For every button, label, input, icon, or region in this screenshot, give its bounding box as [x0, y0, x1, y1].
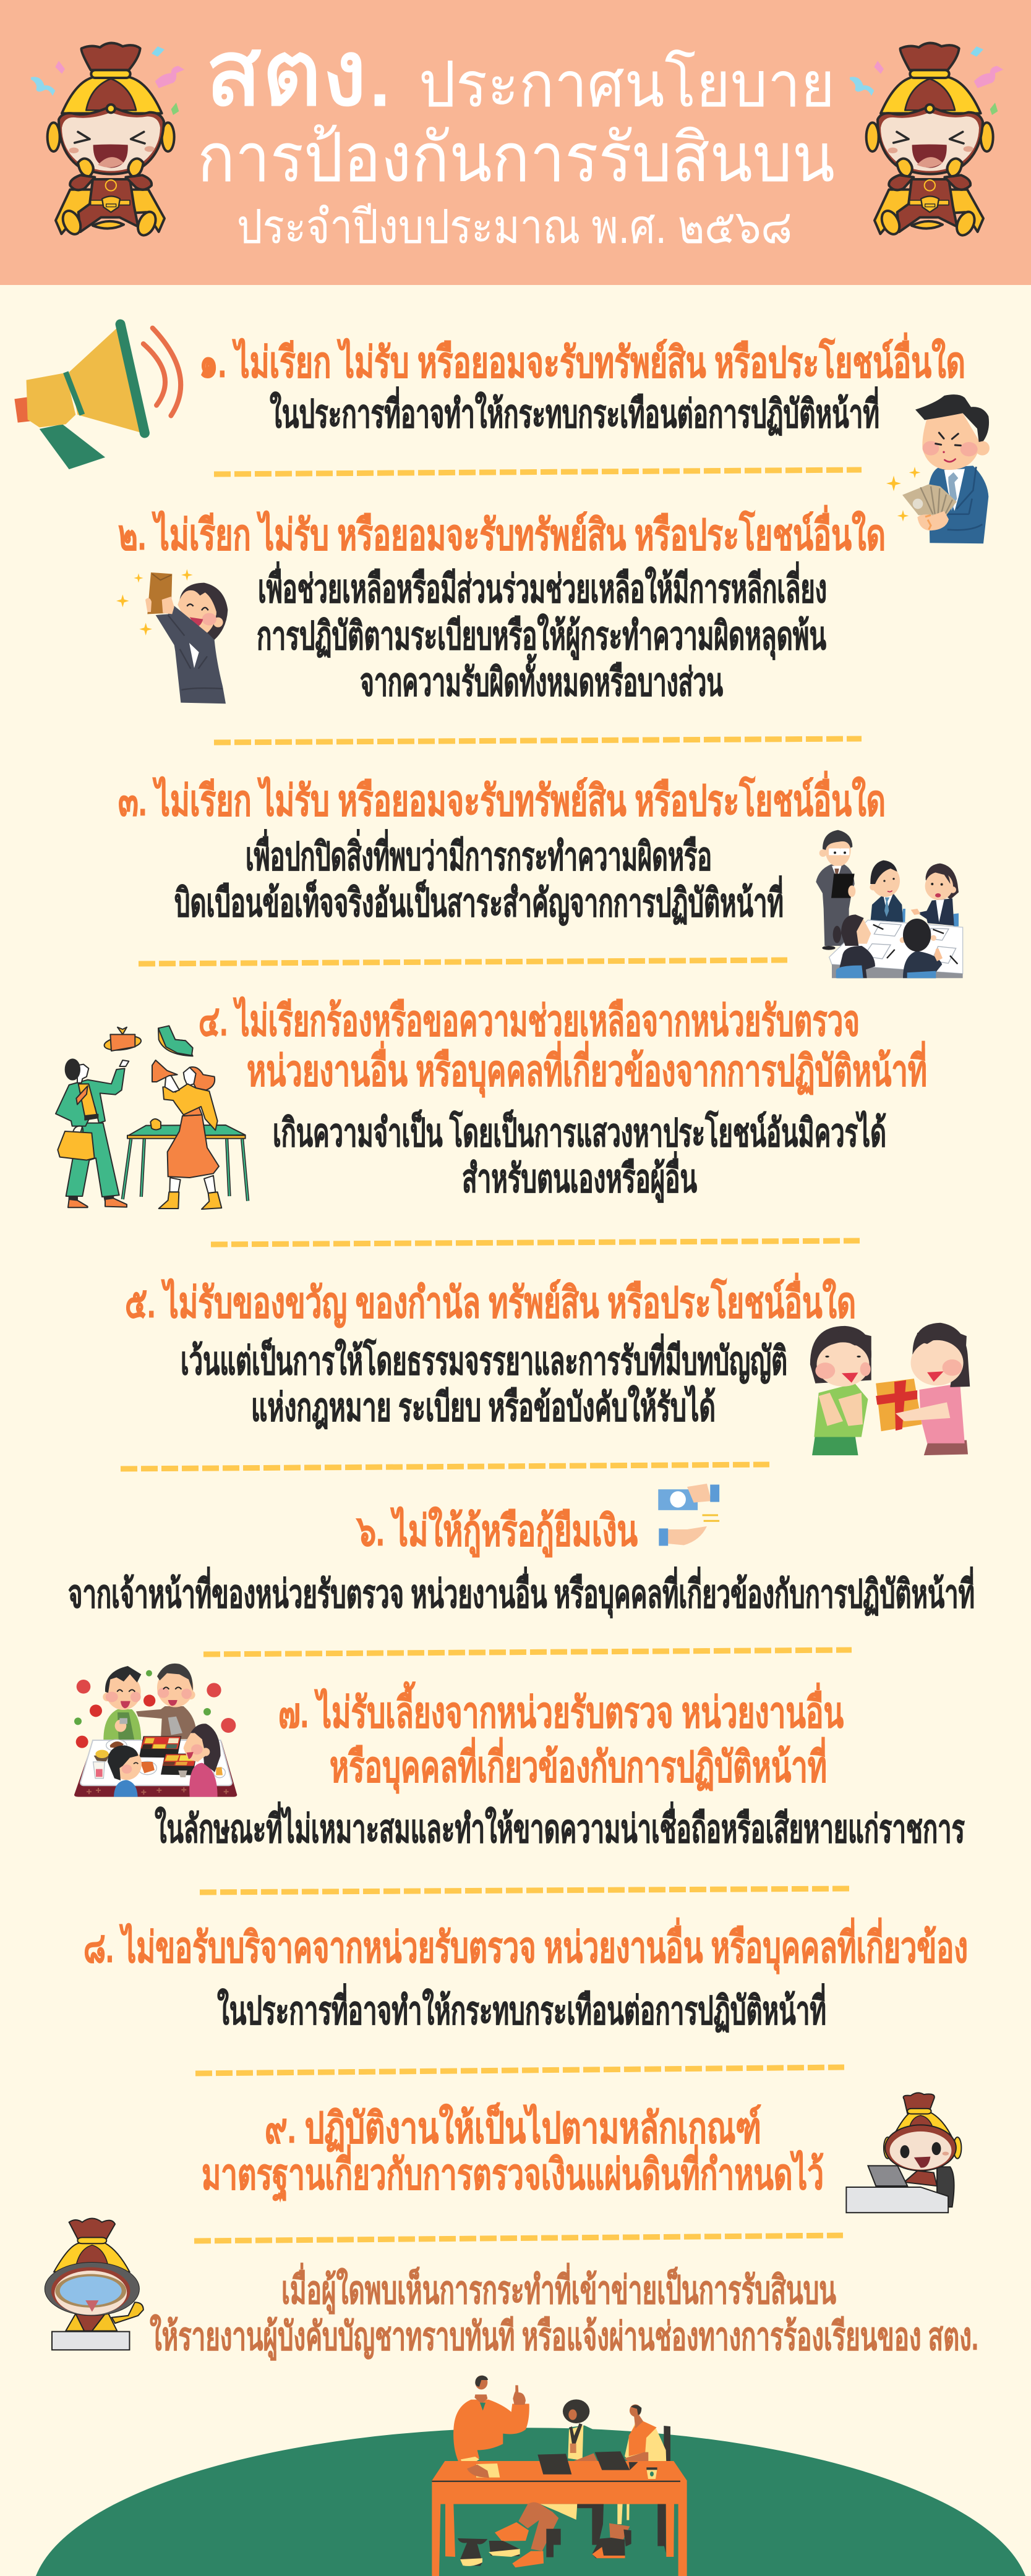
item 8 — [83, 1917, 968, 2033]
title line 1: สตง. — [205, 21, 393, 125]
text 4: สำหรับตนเองหรือผู้อื่น — [462, 1151, 697, 1203]
item 7 — [74, 1664, 965, 1851]
icon: mascot left — [31, 43, 184, 238]
divider 1 — [214, 470, 862, 474]
title line 1: ประกาศนโยบาย — [419, 49, 835, 120]
divider 5 — [121, 1464, 769, 1469]
title line 1 — [205, 21, 835, 125]
laptops — [537, 2451, 638, 2475]
divider 8 — [195, 2067, 844, 2073]
closing text — [150, 2263, 978, 2361]
icon: man with money — [886, 394, 990, 543]
divider 6 — [203, 1650, 852, 1654]
icon: family dinner — [74, 1664, 237, 1797]
item 4 — [56, 996, 927, 1209]
icon: two women with gift — [810, 1323, 970, 1455]
item 1 — [14, 324, 990, 543]
header banner — [0, 0, 1031, 285]
divider 9 — [194, 2235, 843, 2241]
closing note — [45, 2219, 978, 2361]
divider 3 — [139, 960, 787, 964]
title line 3: ประจำปีงบประมาณ พ.ศ. ๒๕๖๘ — [237, 201, 792, 253]
text 5: แห่งกฎหมาย ระเบียบ หรือข้อบังคับให้รับได้ — [251, 1385, 716, 1429]
legs and feet — [458, 2502, 666, 2567]
item 5 — [125, 1272, 970, 1455]
heading 6: ๖. ไม่ให้กู้หรือกู้ยืมเงิน — [356, 1506, 638, 1558]
text 4 — [273, 1109, 886, 1203]
heading 4 — [199, 996, 927, 1098]
woman seated — [563, 2399, 606, 2471]
heading 9 — [202, 2102, 824, 2202]
paper and hand — [467, 2463, 500, 2478]
item 2 — [116, 504, 886, 704]
text 2 — [257, 561, 827, 704]
man standing — [453, 2376, 529, 2468]
title line 2: การป้องกันการรับสินบน — [197, 120, 835, 196]
icon: meeting people — [816, 830, 963, 978]
icon: hands exchanging money — [658, 1484, 719, 1546]
cup — [646, 2467, 657, 2479]
divider 2 — [214, 739, 862, 742]
icon: people with gift and money — [56, 1026, 248, 1209]
heading 9: ๙. ปฏิบัติงานให้เป็นไปตามหลักเกณฑ์ — [265, 2102, 761, 2152]
text 3 — [174, 829, 784, 925]
item 3 — [118, 770, 963, 978]
table — [432, 2461, 687, 2576]
footer illustration: meeting at table — [432, 2376, 687, 2576]
icon: mascot at desk — [846, 2093, 961, 2213]
footer green dome — [36, 2428, 1025, 2576]
icon: mascot right — [850, 43, 1003, 238]
man seated right — [625, 2404, 670, 2465]
divider 7 — [200, 1889, 849, 1892]
icon: mascot with magnifying glass — [45, 2219, 143, 2350]
text 5 — [181, 1333, 787, 1429]
text 3: เพื่อปกปิดสิ่งที่พบว่ามีการกระทำความผิดหรือ — [246, 829, 712, 878]
item 9 — [202, 2093, 961, 2213]
icon: woman with envelope — [116, 569, 228, 704]
item 6 — [68, 1484, 975, 1618]
text 2: จากความรับผิดทั้งหมดหรือบางส่วน — [360, 653, 723, 704]
heading 7 — [278, 1681, 844, 1794]
divider 4 — [211, 1241, 860, 1244]
icon: megaphone — [14, 324, 181, 469]
